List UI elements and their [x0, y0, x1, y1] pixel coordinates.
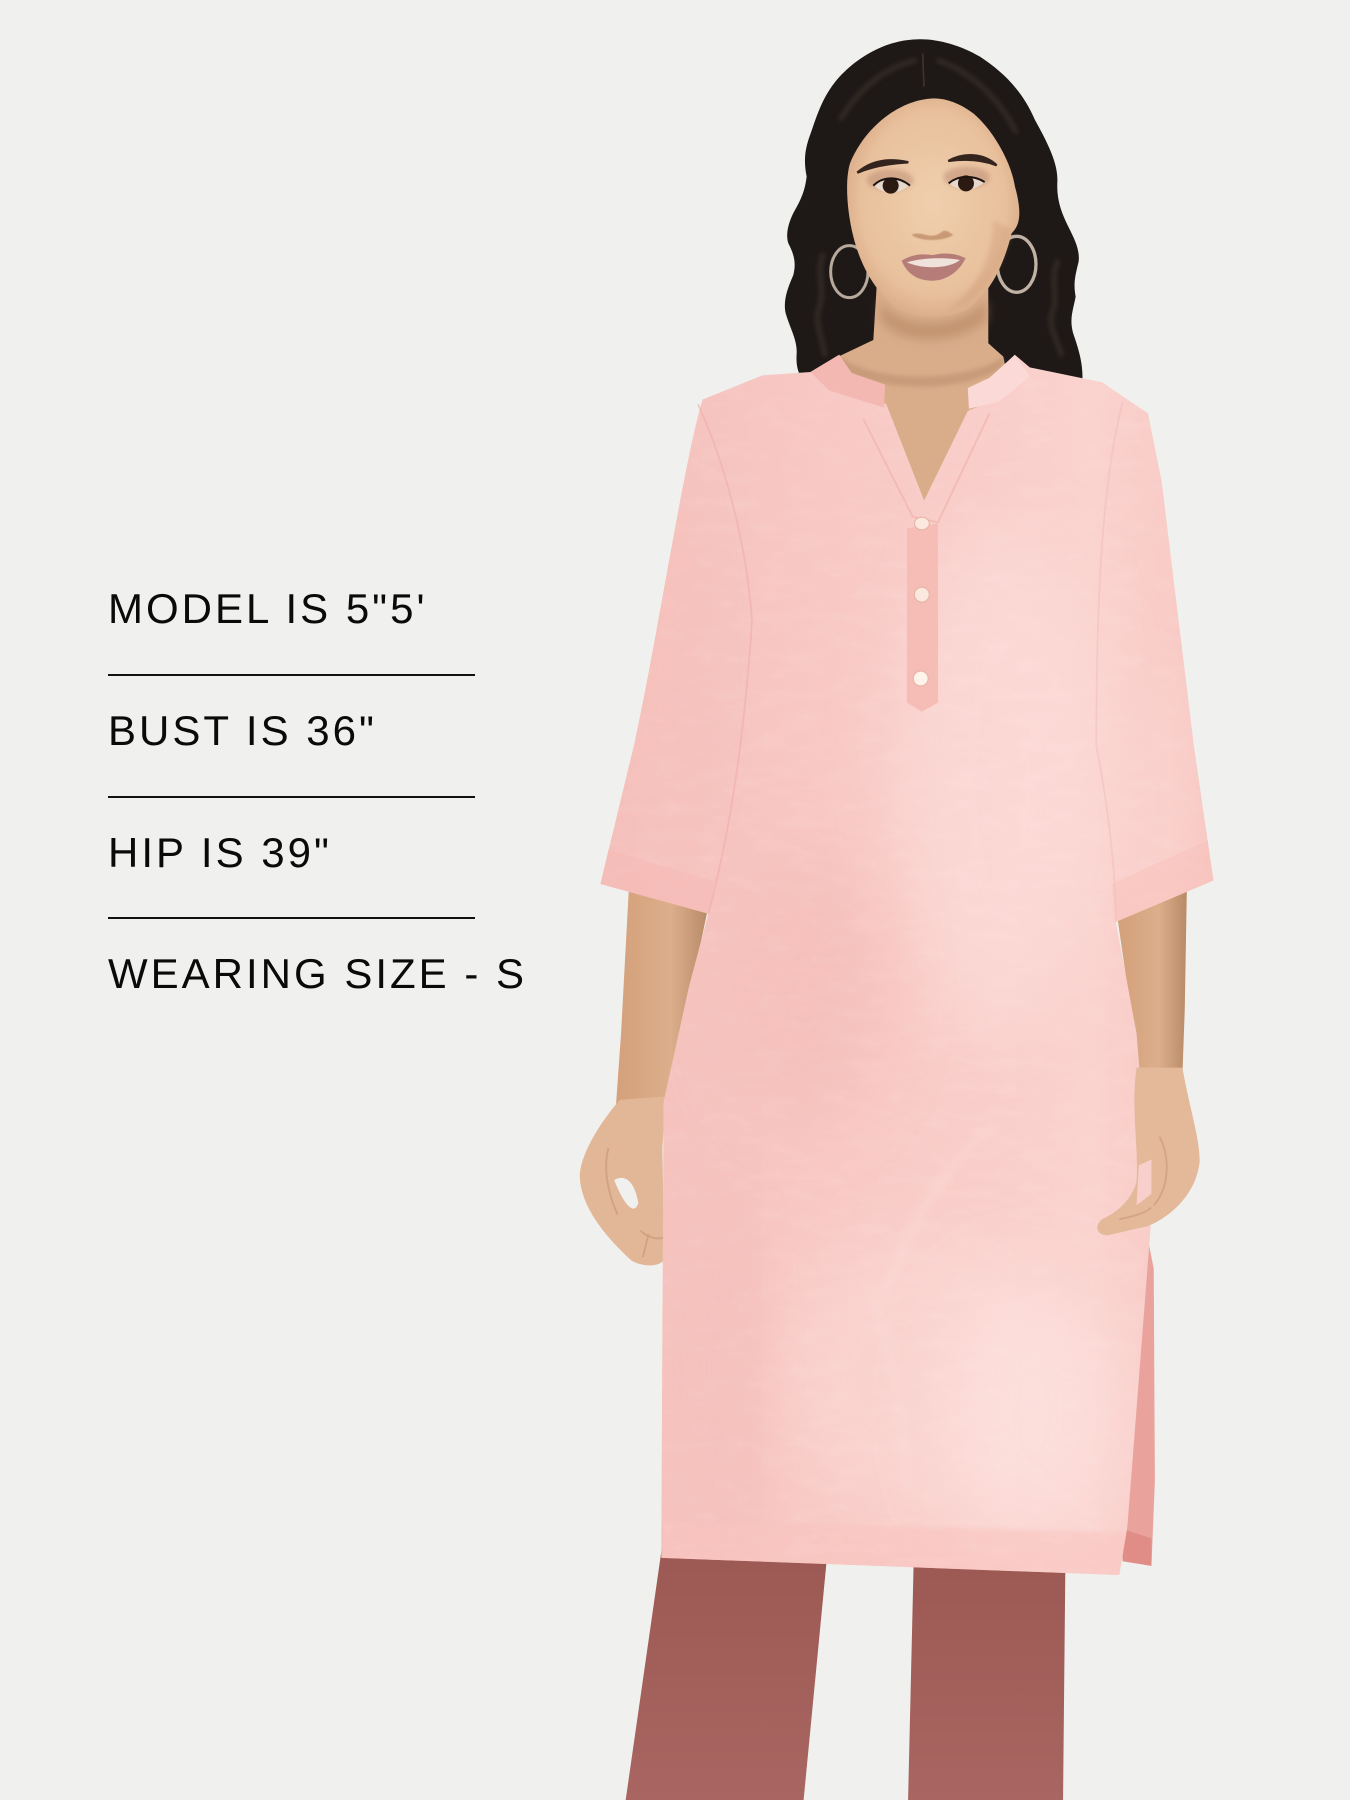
neck and chest — [838, 287, 1007, 502]
left trouser leg — [626, 1544, 828, 1800]
button placket — [907, 523, 938, 712]
kurta body — [600, 355, 1213, 1575]
neck shadow — [880, 300, 987, 340]
right cheek shadow — [947, 220, 1012, 310]
left forearm — [614, 884, 708, 1148]
left eyebrow — [857, 160, 908, 173]
text: hip size: HIP IS 39" — [108, 829, 332, 876]
right collar — [968, 355, 1030, 409]
right hand — [1097, 1068, 1200, 1235]
right eyebrow — [948, 155, 997, 165]
model photo — [580, 39, 1214, 1800]
right hand gap — [1137, 1159, 1151, 1205]
right ear hoop — [997, 236, 1036, 292]
hair parting — [923, 53, 924, 87]
right sleeve seam — [1096, 402, 1123, 922]
neckline placket — [863, 413, 990, 522]
left eye socket shadow — [867, 169, 913, 191]
teeth — [907, 258, 960, 267]
left hand knuckle creases — [606, 1148, 664, 1257]
nose — [912, 231, 953, 240]
lips — [902, 253, 966, 281]
hair highlight — [818, 60, 1062, 357]
side slit inner fabric — [1119, 1240, 1155, 1566]
face — [847, 53, 1019, 317]
text: wearing size: WEARING SIZE - S — [108, 950, 527, 997]
text: model height: MODEL IS 5"5' — [108, 585, 427, 632]
right eye — [949, 175, 985, 191]
trousers — [626, 1544, 1065, 1800]
left sleeve seam — [698, 404, 752, 914]
collar shadow on chest — [840, 357, 1003, 387]
left ear hoop — [831, 246, 868, 298]
right cuff — [1111, 840, 1213, 922]
fabric texture — [574, 344, 1240, 1596]
fabric creases — [872, 1125, 1102, 1515]
button 2 — [914, 587, 929, 602]
right hand knuckle creases — [1119, 1137, 1167, 1219]
button 3 — [913, 671, 928, 686]
side slit fold — [1123, 1529, 1151, 1566]
left hand finger gap — [614, 1178, 638, 1209]
size details panel — [108, 585, 527, 997]
left hand — [580, 1096, 666, 1265]
hair back — [785, 39, 1082, 382]
right eye socket shadow — [943, 167, 990, 188]
text: bust size: BUST IS 36" — [108, 707, 377, 754]
arms and hands — [580, 878, 1187, 1265]
button 1 — [914, 517, 929, 530]
kurta shading — [574, 344, 1240, 1596]
left cuff — [600, 850, 714, 914]
kurta — [600, 354, 1214, 1575]
right forearm — [1116, 878, 1187, 1073]
left eye — [873, 178, 910, 194]
right trouser leg — [908, 1556, 1065, 1800]
left collar — [810, 355, 885, 408]
